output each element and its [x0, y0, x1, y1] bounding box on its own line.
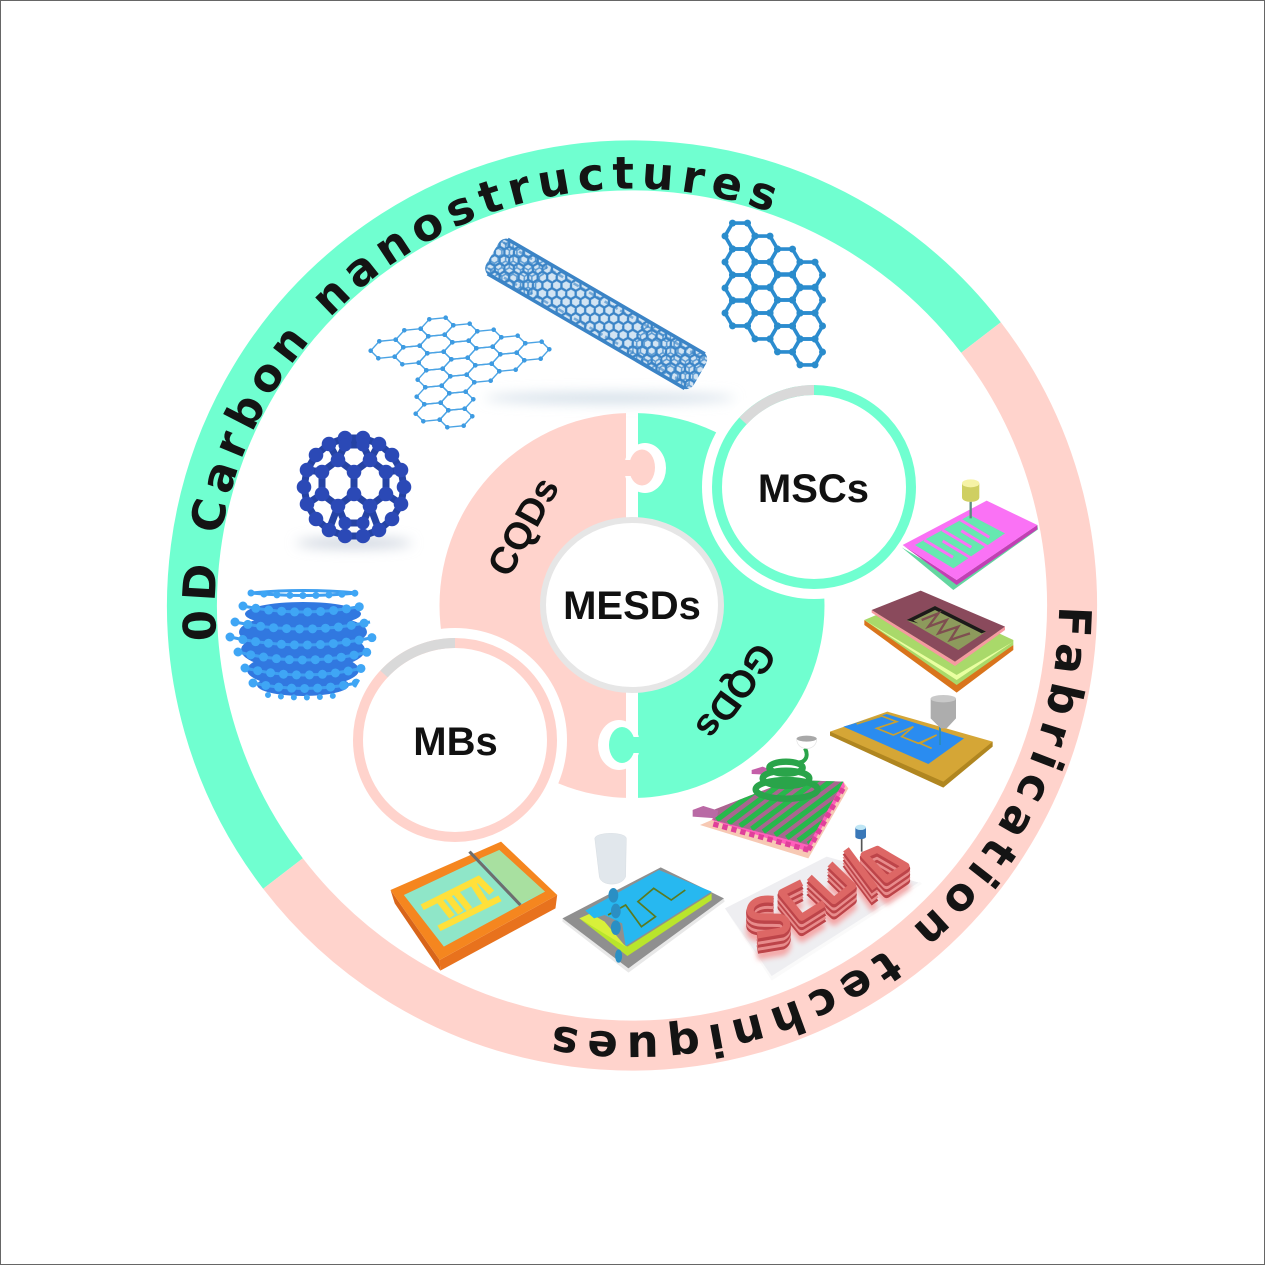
icon: puzzle tab bottom — [598, 720, 644, 770]
icon: pink board with nozzle — [902, 479, 1038, 590]
icon: fullerene C60 — [297, 431, 411, 543]
panel: fabrication techniques outer arc — [283, 338, 1072, 1046]
panel: CQDs puzzle half — [440, 413, 626, 798]
icon: puzzle tab top — [620, 443, 666, 493]
icon: maroon mask stack — [864, 591, 1013, 693]
panel: GQDs puzzle half — [638, 413, 824, 798]
panel: 0D carbon nanostructures outer arc — [192, 165, 981, 874]
panel: MSCs circle — [702, 375, 926, 599]
icon: green spiral on woodpile — [692, 736, 848, 858]
heading: 0D Carbon nanostructures: 0D Carbon nanostructures — [182, 157, 776, 640]
panel: MESDs centre circle — [543, 520, 721, 690]
label: MBs: MBs — [413, 720, 498, 764]
icon: stacked graphene layers — [230, 590, 375, 698]
label: MSCs: MSCs — [758, 467, 869, 511]
icon: blue inkjet printed electrode — [562, 833, 725, 973]
icon: carbon nanotube — [482, 235, 710, 392]
icon: flat graphene sheet — [368, 315, 552, 430]
label: CQDs: CQDs — [480, 471, 568, 583]
icon: thick graphene sheet — [722, 220, 826, 368]
label: GQDs: GQDs — [686, 635, 784, 747]
icon: nanotube shadow — [485, 393, 735, 403]
icon: red 3D printed electrodes — [725, 825, 922, 981]
icon: orange screen printing frame — [391, 842, 557, 971]
icon: fullerene shadow — [296, 538, 412, 548]
panel: MBs circle — [343, 628, 567, 852]
icon: blue electrode on gold board with nozzle — [830, 695, 993, 788]
label: MESDs: MESDs — [563, 584, 701, 628]
heading: Fabrication techniques: Fabrication techniques — [554, 610, 1092, 1059]
